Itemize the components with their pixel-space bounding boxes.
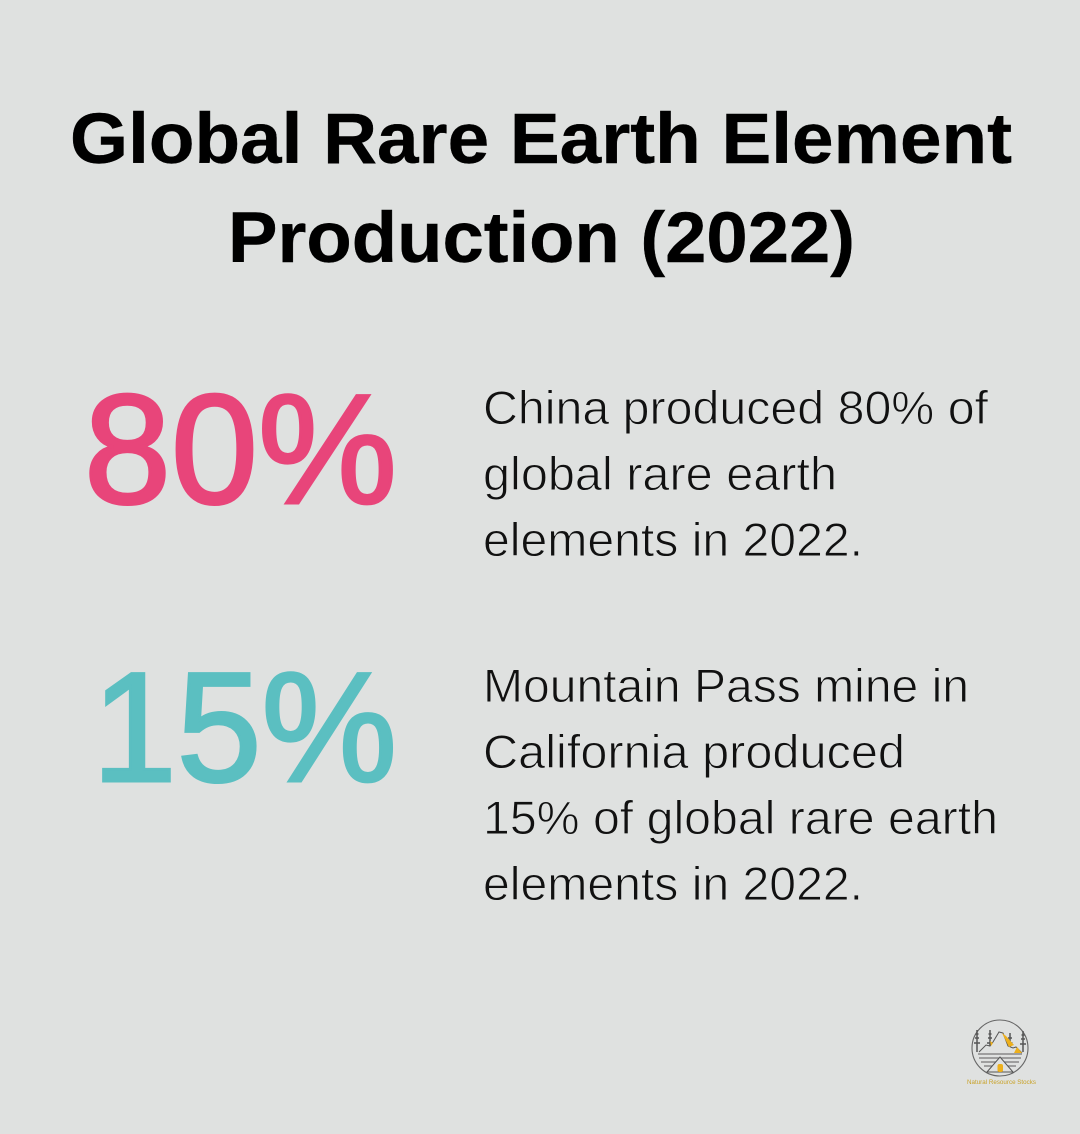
text block: Mountain Pass (483, 659, 998, 910)
title: Global Rare Earth Element (70, 100, 1012, 179)
text block: Mountain Pass: elements in 2022. (483, 857, 863, 910)
icon: mountains (979, 1032, 1022, 1053)
text block: Mountain Pass: California produced (483, 725, 905, 778)
statistic: 80%: 80% (84, 363, 397, 537)
text block: Mountain Pass: 15% of global rare earth (483, 791, 998, 844)
text block: Mountain Pass: Mountain Pass mine in (483, 659, 969, 712)
title: Production (2022) (228, 199, 855, 278)
water lines (978, 1054, 1022, 1066)
text block: China: global rare earth (483, 447, 837, 500)
icon: trees (974, 1030, 1026, 1052)
icon: tent (987, 1057, 1013, 1072)
logo caption: Natural Resource Stocks (967, 1079, 1037, 1086)
statistic: 15%: 15% (92, 641, 397, 815)
text block: China: elements in 2022. (483, 513, 863, 566)
logo: Natural Resource Stocks (967, 1020, 1037, 1086)
text block: China (483, 381, 989, 566)
title (70, 100, 1012, 278)
text block: China: China produced 80% of (483, 381, 989, 434)
